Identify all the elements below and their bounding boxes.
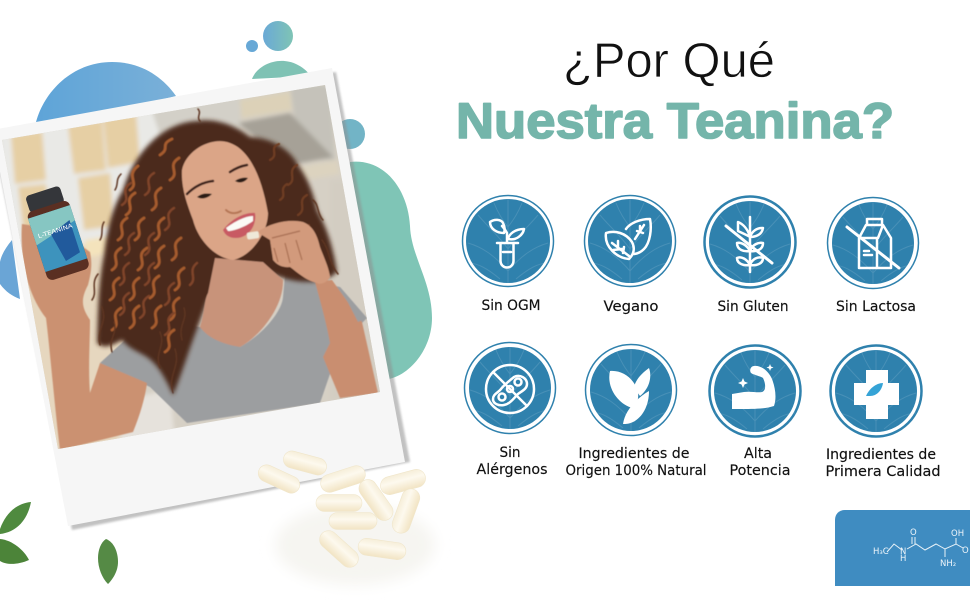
badge: Vegano [584, 196, 676, 286]
label: Ingredientes de Primera Calidad: Primera Calidad [826, 464, 940, 480]
polaroid photo [0, 68, 410, 530]
icon: crossed milk carton [847, 219, 899, 268]
icon: crossed wheat [726, 217, 772, 272]
icon: plant in test tube [490, 220, 524, 268]
pill [246, 231, 259, 240]
hair [92, 109, 338, 395]
label: Sin Lactosa: Sin Lactosa [836, 299, 916, 315]
label: Ingredientes de Primera Calidad: Ingredientes de [826, 447, 936, 463]
right arm and hand [246, 221, 378, 398]
icon: medical cross with leaf [854, 370, 899, 419]
molecule: theanine structure [873, 528, 969, 569]
bottle in hand: L-TEANINA [37, 222, 74, 240]
label: Ingredientes de Origen 100% Natural: Origen 100% Natural [566, 463, 706, 479]
face [182, 141, 268, 260]
label: Ingredientes de Primera Calidad [826, 447, 940, 480]
icon: crossed allergen [486, 365, 534, 413]
molecule panel [835, 510, 970, 586]
label: Sin OGM: Sin OGM [482, 298, 540, 314]
badge: Sin Gluten [704, 196, 796, 288]
woman [22, 109, 378, 450]
badge: Origen natural [586, 344, 676, 436]
leaves [0, 502, 118, 584]
photo scene [0, 80, 390, 460]
shirt [100, 275, 367, 423]
label: Alta Potencia: Alta [744, 446, 772, 462]
label: Alta Potencia [730, 446, 790, 479]
label: Ingredientes de Origen 100% Natural [566, 446, 706, 479]
label: Alta Potencia: Potencia [730, 463, 790, 479]
icon: flexed arm [732, 364, 775, 409]
neck and chest [200, 258, 283, 347]
bottle in hand [26, 186, 89, 280]
molecule: theanine structure: H₃C [873, 547, 889, 557]
eyes, nose and mouth [187, 165, 255, 238]
label: Sin Alérgenos: Sin [500, 445, 520, 461]
molecule: theanine structure: H [900, 554, 906, 564]
background blobs [0, 21, 432, 380]
label: Sin Alérgenos [476, 445, 548, 478]
molecule: theanine structure: OH [951, 529, 964, 539]
title: ¿Por Qué [563, 34, 775, 88]
label: Ingredientes de Origen 100% Natural: Ingredientes de [578, 446, 690, 462]
title [456, 34, 894, 149]
badge: Sin OGM [462, 196, 554, 286]
badge: Sin Alérgenos [464, 342, 556, 434]
badge: Sin Lactosa [828, 198, 918, 288]
kitchen background [0, 85, 390, 450]
molecule: theanine structure: O [910, 528, 917, 538]
label: Sin Gluten: Sin Gluten [718, 299, 788, 315]
badge: Alta Potencia [710, 346, 800, 436]
icon: solid leaves [609, 368, 650, 424]
badge: Primera Calidad [830, 346, 922, 436]
molecule: theanine structure: NH₂ [940, 559, 956, 569]
label: Vegano: Vegano [604, 299, 658, 315]
label: Sin Alérgenos: Alérgenos [476, 462, 548, 478]
left arm and hand [22, 224, 147, 450]
title: Nuestra Teanina? [456, 93, 894, 149]
capsules [255, 449, 435, 585]
icon: two leaves [606, 219, 651, 259]
molecule: theanine structure: O [962, 546, 969, 556]
molecule: theanine structure: N [900, 547, 906, 557]
